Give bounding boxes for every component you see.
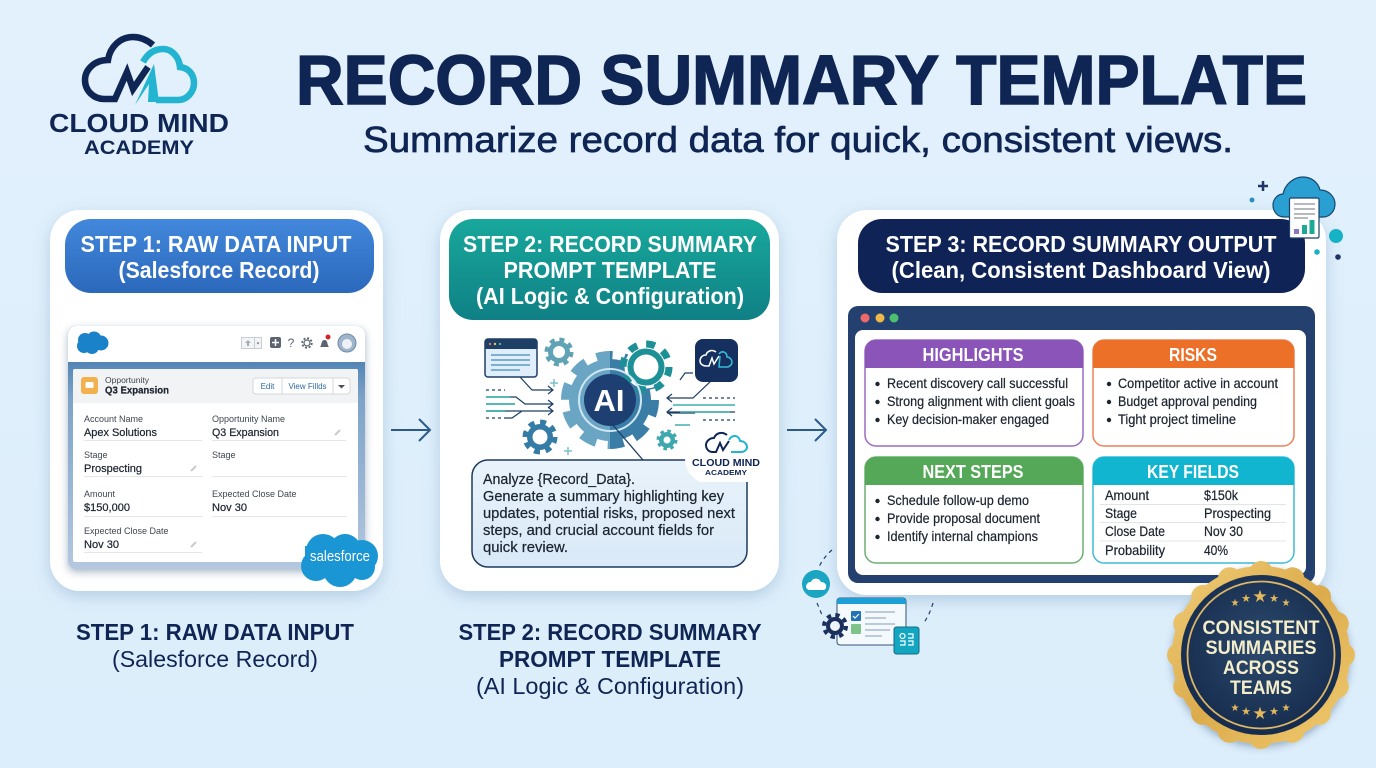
badge stars (1231, 587, 1291, 723)
panel: next steps: NEXT STEPS (922, 462, 1024, 482)
record fields: Expected Close Date (84, 526, 169, 536)
badge stars: ★ (1282, 703, 1291, 714)
step 3 header pill: STEP 3: RECORD SUMMARY OUTPUT (886, 231, 1277, 257)
panel: key fields: $150k (1204, 487, 1239, 503)
prompt text box: steps, and crucial account fields for (483, 523, 714, 539)
badge stars: ★ (1269, 593, 1279, 605)
small logo badge: CLOUD MIND (692, 457, 760, 469)
icon: big gear (566, 356, 654, 444)
step 2 caption: (AI Logic & Configuration) (476, 673, 744, 699)
buttons (253, 378, 350, 394)
subtitle: Summarize record data for quick, consistent views. (363, 119, 1233, 160)
record fields: Stage (84, 450, 108, 460)
buttons: Edit (261, 382, 275, 391)
panel: next steps: Identify internal champions (887, 528, 1038, 544)
panel: key fields: Stage (1105, 505, 1137, 521)
panel: highlights: Strong alignment with client goals (887, 393, 1075, 409)
title: RECORD SUMMARY TEMPLATE (296, 41, 1307, 119)
badge stars: ★ (1231, 703, 1240, 714)
panel: next steps (865, 457, 1083, 563)
step 1 caption: STEP 1: RAW DATA INPUT (76, 619, 354, 645)
icon: small blue gear (525, 422, 555, 452)
panel: next steps: Provide proposal document (887, 510, 1040, 526)
panel: key fields: Close Date (1105, 523, 1165, 539)
step 2 caption: PROMPT TEMPLATE (499, 646, 721, 672)
icon: salesforce cloud small (77, 332, 108, 354)
connector lines left (486, 377, 553, 418)
step 2 header pill: STEP 2: RECORD SUMMARY (463, 231, 757, 257)
arrow: step 1 to step 2 (391, 419, 430, 441)
panel: step 3 output (837, 210, 1326, 595)
record card: Prospecting (84, 463, 142, 475)
icon: teal tile (894, 627, 919, 654)
step 2 caption: STEP 2: RECORD SUMMARY (458, 619, 762, 645)
step 1 header pill: (Salesforce Record) (118, 257, 320, 283)
panel: highlights: Recent discovery call successful (887, 375, 1068, 391)
icon: teal gear (623, 344, 669, 390)
step 2 caption (458, 619, 762, 699)
salesforce record screen (68, 326, 378, 587)
step 1 caption: (Salesforce Record) (112, 646, 318, 672)
badge: consistent summaries across teams (1172, 566, 1350, 744)
logo: Cloud Mind Academy (49, 37, 229, 159)
badge stars: ★ (1252, 704, 1268, 723)
record card: Q3 Expansion (212, 427, 279, 439)
record fields (84, 414, 297, 536)
record fields: Account Name (84, 414, 143, 424)
logo: Cloud Mind Academy: CLOUD MIND (49, 108, 229, 138)
icon: small teal gear lower (658, 431, 676, 449)
badge stars: ★ (1231, 598, 1240, 609)
toolbar icons (242, 334, 356, 352)
prompt text box: Generate a summary highlighting key (483, 489, 725, 505)
badge stars: ★ (1241, 593, 1251, 605)
record fields: Stage (212, 450, 236, 460)
badge: consistent summaries across teams: ACROSS (1223, 657, 1299, 679)
step 2 header pill (449, 219, 770, 320)
badge: consistent summaries across teams: CONSISTENT (1202, 617, 1320, 639)
icon: cloud report top right (1250, 177, 1343, 260)
icon: salesforce logo: salesforce (310, 549, 370, 565)
badge stars: ★ (1282, 598, 1291, 609)
panel: key fields: Prospecting (1204, 505, 1271, 521)
icon: salesforce logo (301, 534, 378, 587)
step 1 header pill (65, 219, 374, 293)
small logo badge (685, 428, 765, 482)
step 2 header pill: (AI Logic & Configuration) (476, 283, 744, 309)
badge stars: ★ (1241, 706, 1251, 718)
panel: step 1 raw data input (50, 210, 383, 591)
panel: key fields: KEY FIELDS (1147, 462, 1239, 482)
connector lines right (667, 373, 735, 425)
badge stars: ★ (1252, 587, 1268, 606)
icon: dashboard checklist illustration (802, 550, 933, 654)
arrow: step 2 to step 3 (787, 419, 826, 441)
panel: highlights: Key decision-maker engaged (887, 411, 1049, 427)
step 1 caption (76, 619, 354, 672)
panel: highlights: HIGHLIGHTS (922, 345, 1024, 365)
record fields: Amount (84, 489, 116, 499)
icon: navy gear (824, 615, 846, 637)
logo: Cloud Mind Academy: ACADEMY (84, 138, 194, 159)
step 1 header pill: STEP 1: RAW DATA INPUT (80, 231, 352, 257)
icon: checklist window (837, 598, 906, 645)
record card: Nov 30 (212, 502, 247, 514)
panel: key fields: Nov 30 (1204, 523, 1243, 539)
prompt text box: quick review. (483, 540, 568, 556)
panel: risks: RISKS (1169, 345, 1217, 365)
small logo badge: ACADEMY (705, 468, 747, 477)
icon: logo tile (695, 339, 738, 382)
step 3 header pill: (Clean, Consistent Dashboard View) (892, 257, 1270, 283)
record fields: Expected Close Date (212, 489, 297, 499)
badge: consistent summaries across teams: SUMMARIES (1206, 637, 1316, 659)
prompt text box: updates, potential risks, proposed next (483, 506, 735, 522)
prompt text box: Analyze {Record_Data}. (483, 472, 635, 488)
step 3 header pill (858, 219, 1305, 293)
toolbar icons: ? (288, 336, 295, 350)
AI gears illustration (485, 339, 738, 460)
record card: Q3 Expansion (105, 384, 169, 396)
badge stars: ★ (1269, 706, 1279, 718)
panel: next steps: Schedule follow-up demo (887, 492, 1029, 508)
prompt text box (472, 460, 747, 567)
record card: Opportunity (105, 375, 150, 385)
panel: highlights (865, 340, 1083, 446)
icon: opportunity (81, 377, 98, 394)
step 2 header pill: PROMPT TEMPLATE (504, 257, 716, 283)
record fields: Opportunity Name (212, 414, 285, 424)
panel: key fields: 40% (1204, 542, 1228, 558)
panel: risks (1093, 340, 1294, 446)
AI core: AI (594, 383, 624, 418)
icon: small teal gear (546, 340, 572, 364)
record card (73, 369, 358, 562)
record card: Nov 30 (84, 539, 119, 551)
panel: step 2 prompt template (440, 210, 779, 591)
panel: key fields: Amount (1105, 487, 1149, 503)
icon: browser window (485, 339, 537, 377)
badge: consistent summaries across teams: TEAMS (1230, 677, 1292, 699)
icon: cloud circle (802, 570, 830, 598)
record card: $150,000 (84, 502, 130, 514)
panel: key fields: Probability (1105, 542, 1165, 558)
AI core (579, 369, 641, 431)
panel: risks: Competitor active in account (1118, 375, 1278, 391)
panel: risks: Tight project timeline (1118, 411, 1236, 427)
dashboard window (848, 306, 1315, 583)
record card: Apex Solutions (84, 427, 157, 439)
buttons: View Fillds (288, 382, 327, 391)
panel: key fields (1093, 457, 1294, 563)
panel: risks: Budget approval pending (1118, 393, 1257, 409)
